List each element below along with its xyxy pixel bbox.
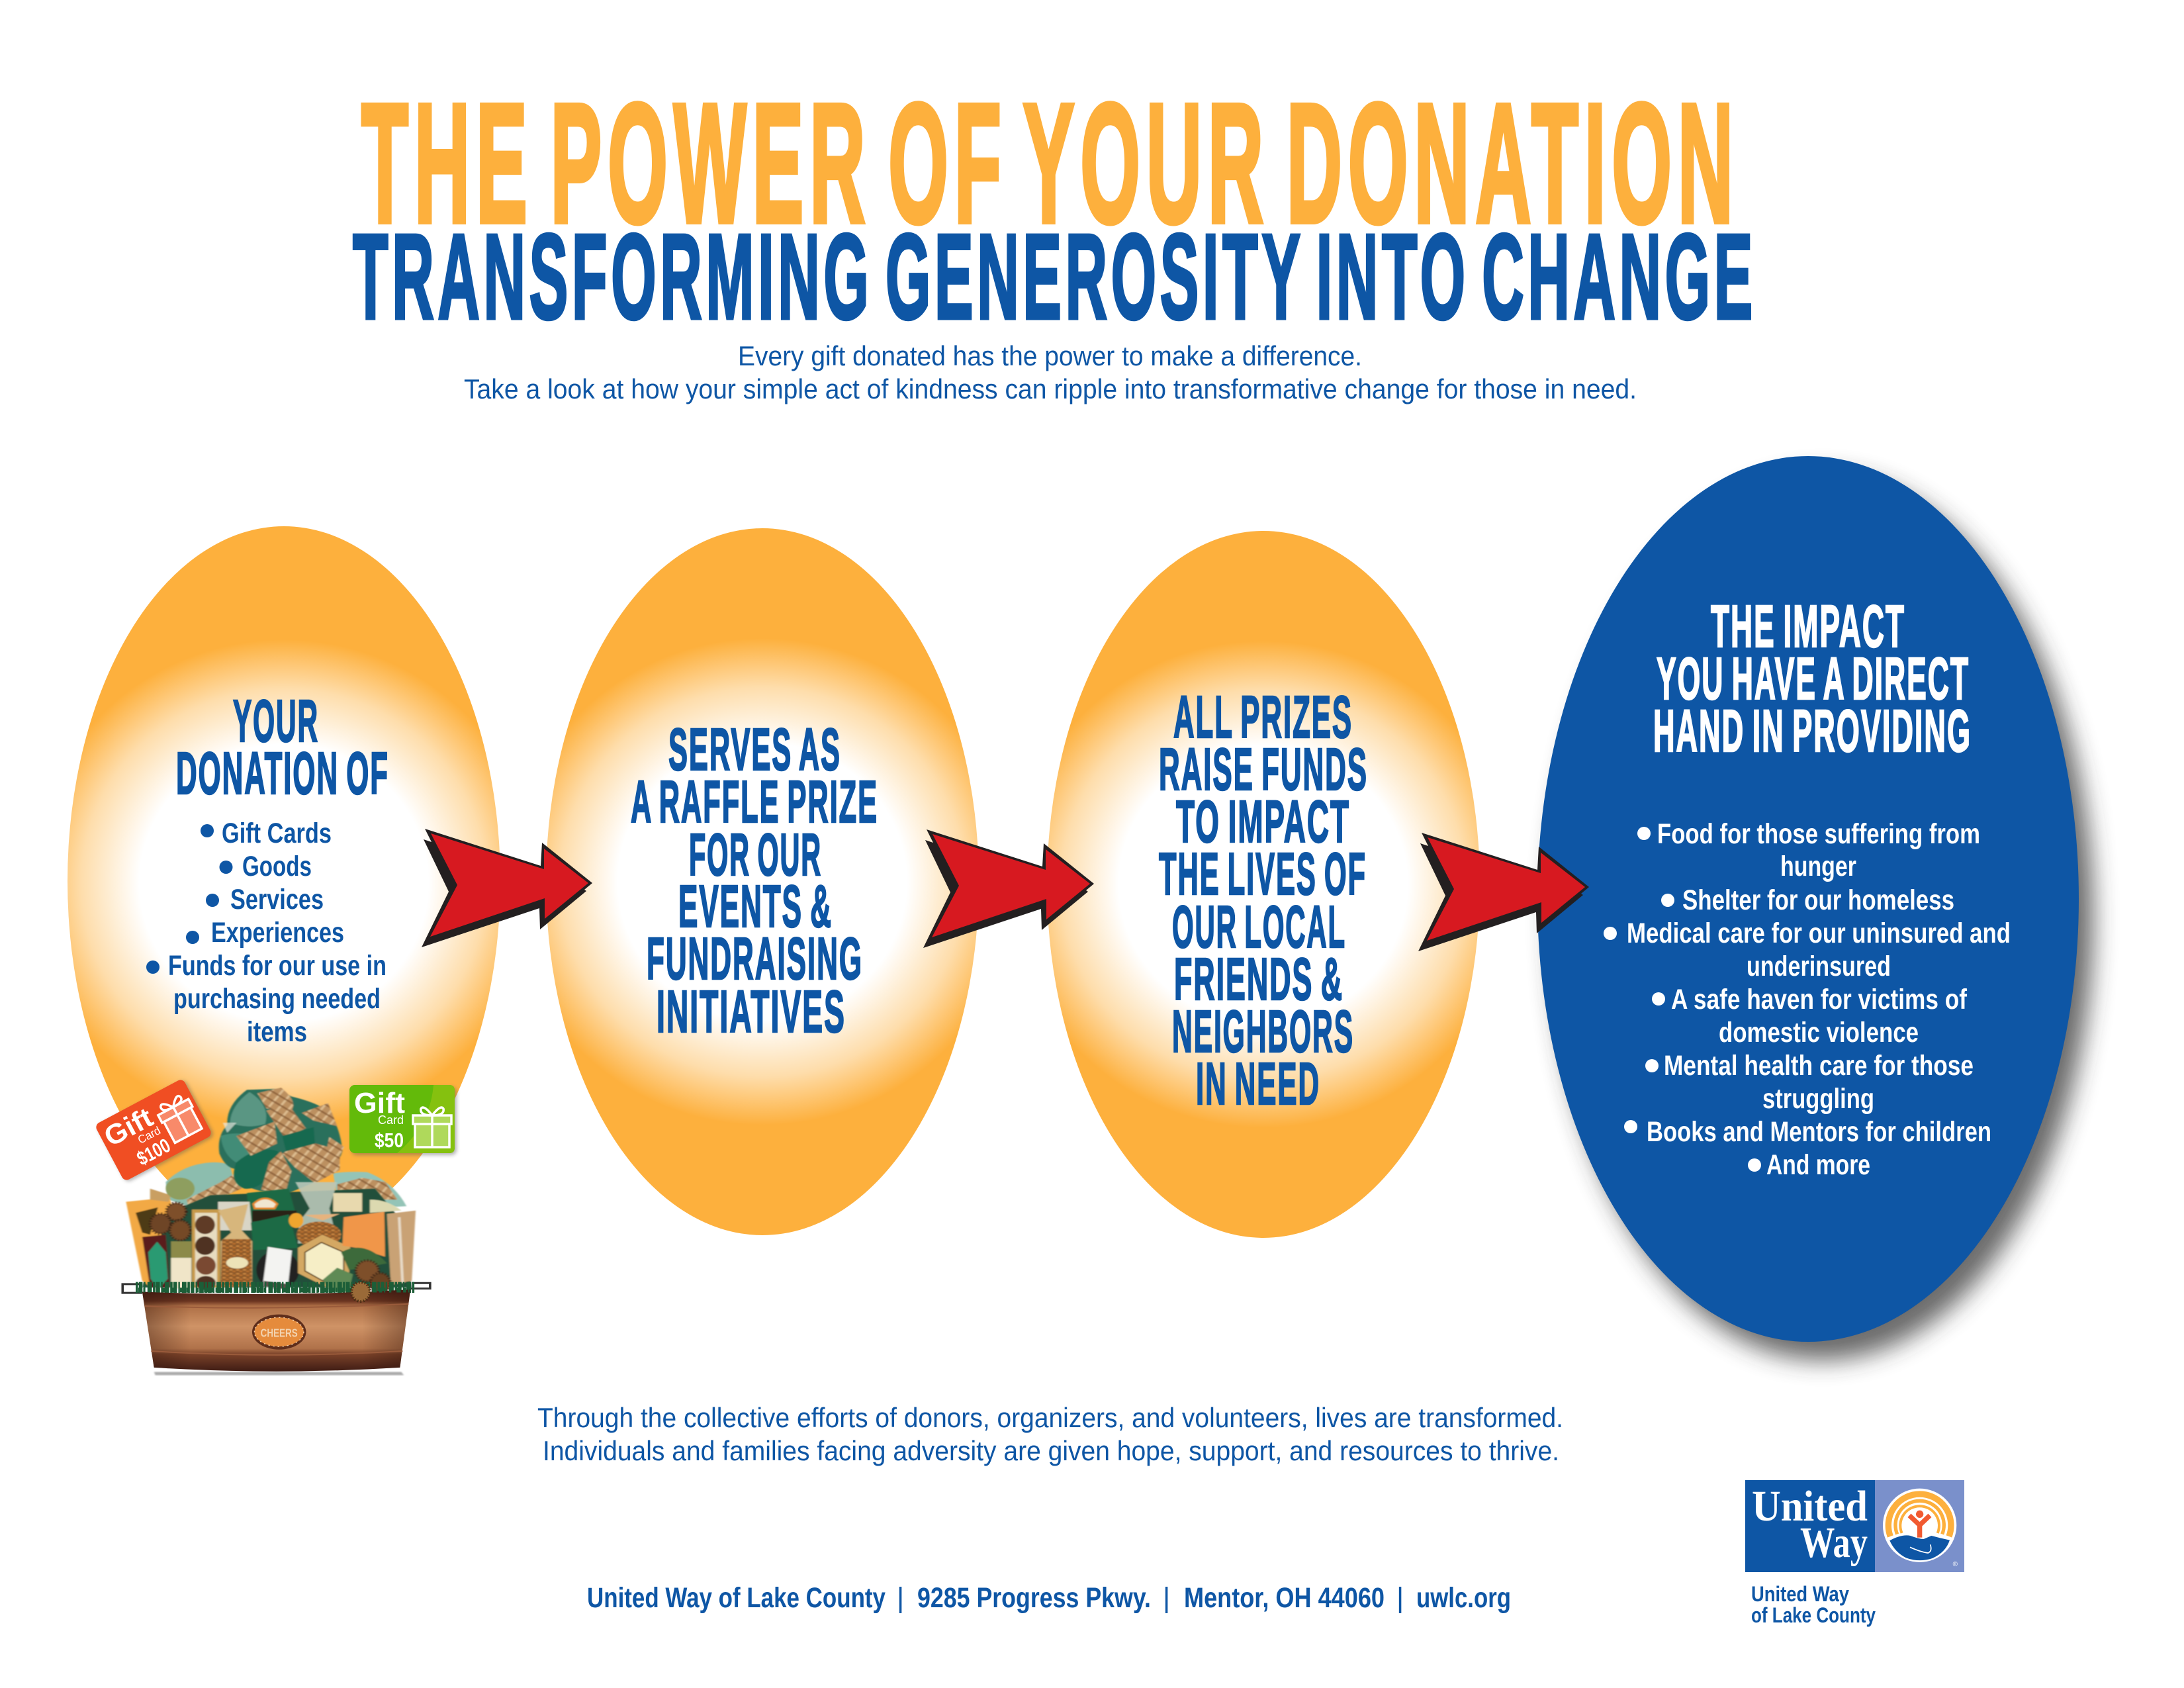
card text: Gift	[354, 1087, 405, 1119]
arrow 3	[1418, 833, 1589, 951]
panel: raffle prize: A RAFFLE PRIZE	[631, 769, 878, 835]
raffle prize text: INITIATIVES	[657, 979, 846, 1045]
logo chapter name: of Lake County	[1751, 1603, 1876, 1627]
panel: raise funds: THE LIVES OF	[1159, 841, 1367, 908]
arrow 1	[422, 829, 592, 947]
logo chapter name: United Way	[1751, 1582, 1849, 1606]
tub handles	[122, 1283, 430, 1293]
impact list: Food for those suffering from	[1657, 818, 1980, 850]
gift card: $100	[95, 1078, 215, 1184]
impact heading	[1653, 594, 1972, 765]
donation list: Experiences	[211, 917, 344, 949]
title block	[353, 69, 1756, 404]
heading: your donation of: YOUR	[233, 688, 319, 755]
raffle prize text: FOR OUR	[689, 822, 822, 888]
plaque	[252, 1315, 306, 1350]
raffle prize text: EVENTS &	[678, 874, 833, 940]
footer contact line: |	[1396, 1582, 1404, 1614]
card text: $50	[375, 1129, 404, 1152]
impact list: Shelter for our homeless	[1682, 884, 1954, 916]
card text: $100	[134, 1135, 174, 1170]
closing text: Individuals and families facing adversity are given hope, support, and resources to thrive.	[543, 1435, 1559, 1466]
logo wordmark: Way	[1800, 1519, 1868, 1567]
logo wordmark	[1752, 1482, 1868, 1567]
logo wordmark: United	[1752, 1482, 1868, 1530]
card text	[354, 1087, 405, 1152]
panel: your donation of: DONATION OF	[176, 741, 389, 807]
intro text: Every gift donated has the power to make a difference.	[738, 340, 1362, 371]
panel: raffle prize	[546, 528, 979, 1235]
shredded paper	[136, 1271, 414, 1304]
arrow 2	[923, 829, 1094, 948]
donation list	[146, 818, 387, 1048]
footer contact line: |	[1163, 1582, 1170, 1614]
donation list: items	[247, 1016, 307, 1048]
closing text: Through the collective efforts of donors, organizers, and volunteers, lives are transformed.	[537, 1402, 1563, 1433]
impact list: Mental health care for those	[1664, 1050, 1974, 1082]
donation list: Services	[230, 884, 324, 915]
logo emblem	[1883, 1489, 1958, 1568]
donation list: Funds for our use in	[168, 950, 387, 982]
raise funds text: TO IMPACT	[1176, 789, 1350, 855]
raffle prize text	[631, 717, 878, 1045]
footer contact line	[587, 1582, 1511, 1614]
raise funds text: OUR LOCAL	[1172, 894, 1346, 961]
raise funds text	[1159, 684, 1368, 1117]
panel: raise funds	[1047, 531, 1480, 1238]
copper tub	[138, 1289, 412, 1372]
logo emblem: ®	[1953, 1561, 1958, 1568]
raise funds text: ALL PRIZES	[1173, 684, 1353, 751]
intro text	[464, 340, 1637, 404]
donation list: purchasing needed	[173, 983, 381, 1015]
impact list: Books and Mentors for children	[1647, 1116, 1991, 1148]
ribbon back	[165, 1162, 406, 1211]
donation list: Gift Cards	[222, 818, 332, 849]
basket contents	[126, 1178, 416, 1293]
card text: Gift	[99, 1102, 158, 1152]
impact heading: THE IMPACT	[1711, 594, 1905, 660]
bow	[219, 1088, 344, 1196]
heading: your donation of	[176, 688, 389, 807]
raise funds text: IN NEED	[1196, 1051, 1320, 1117]
card text: Card	[136, 1124, 163, 1147]
raise funds text: NEIGHBORS	[1172, 999, 1354, 1065]
footer contact line: |	[897, 1582, 904, 1614]
plaque: CHEERS	[261, 1327, 298, 1340]
closing text	[537, 1402, 1563, 1466]
impact list: struggling	[1762, 1083, 1874, 1115]
impact list: hunger	[1780, 851, 1856, 882]
raffle prize text: SERVES AS	[668, 717, 841, 783]
gift icon	[154, 1092, 204, 1144]
footer contact line: Mentor, OH 44060	[1184, 1582, 1385, 1614]
panel: your donation of	[68, 526, 500, 1236]
impact list: And more	[1766, 1149, 1870, 1181]
raffle prize text: FUNDRAISING	[647, 926, 863, 992]
gift card: $50	[349, 1085, 457, 1155]
raise funds text: FRIENDS &	[1174, 947, 1343, 1013]
logo chapter name	[1751, 1582, 1876, 1627]
impact list: underinsured	[1747, 951, 1891, 982]
footer contact line: United Way of Lake County	[587, 1582, 886, 1614]
donation list: Goods	[242, 851, 312, 882]
panel: the impact	[1537, 456, 2093, 1360]
impact list: domestic violence	[1719, 1017, 1919, 1049]
impact list: A safe haven for victims of	[1671, 984, 1968, 1015]
gift icon	[413, 1107, 451, 1147]
logo: United Way	[1745, 1480, 1964, 1627]
footer contact line: uwlc.org	[1416, 1582, 1511, 1614]
intro text: Take a look at how your simple act of kindness can ripple into transformative change for those in need.	[464, 373, 1637, 404]
footer contact line: 9285 Progress Pkwy.	[917, 1582, 1151, 1614]
impact list: Medical care for our uninsured and	[1627, 917, 2011, 949]
card text	[99, 1100, 174, 1179]
gift basket illustration	[122, 1088, 430, 1376]
panel: raise funds: RAISE FUNDS	[1159, 737, 1368, 803]
card text: Card	[378, 1113, 404, 1127]
impact list	[1604, 818, 2011, 1181]
